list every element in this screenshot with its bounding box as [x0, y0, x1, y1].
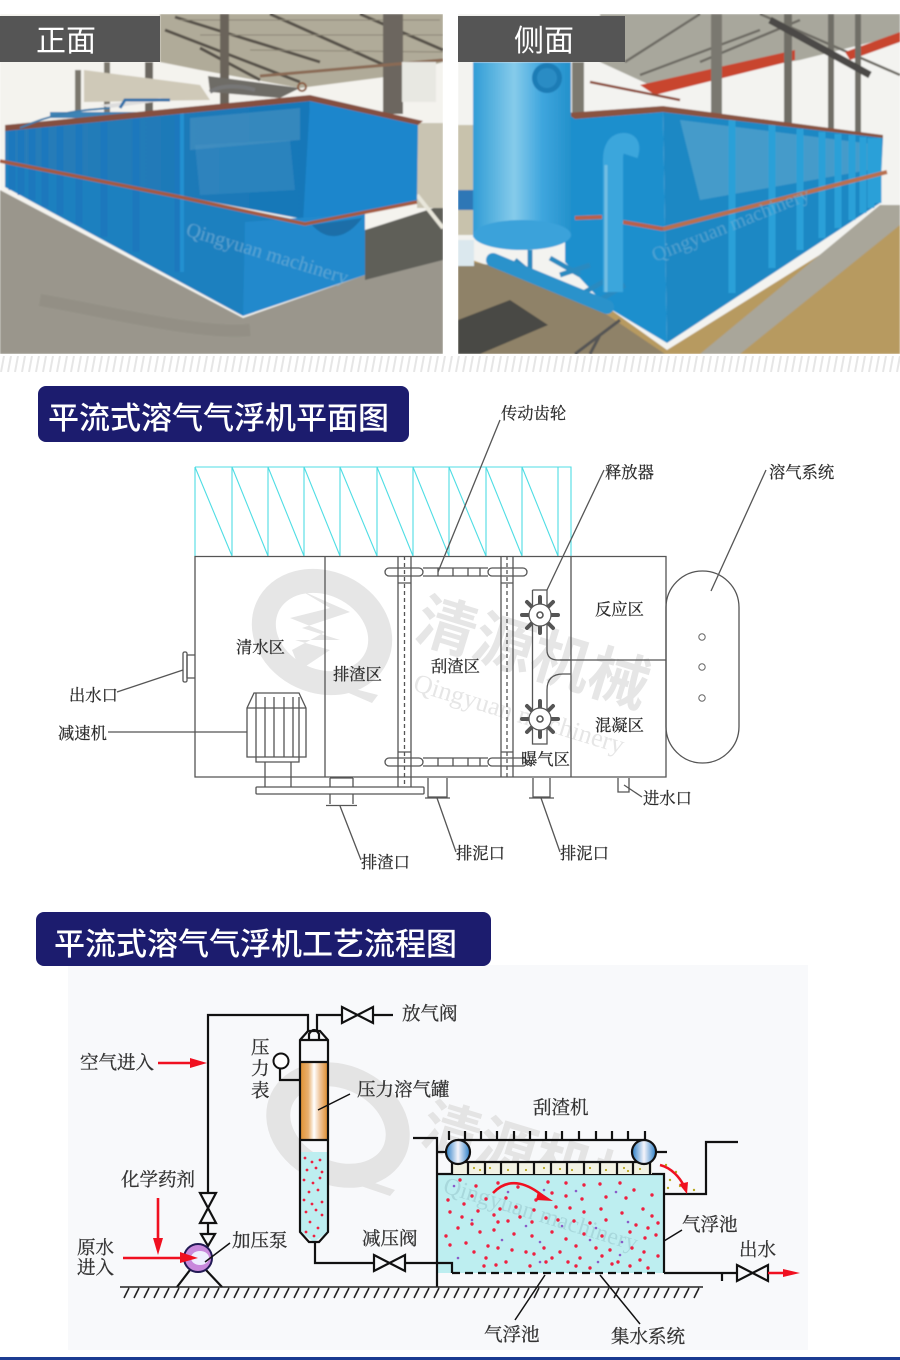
- pressure gauge: [274, 1054, 300, 1080]
- flow labels: 压: [251, 1038, 270, 1059]
- process flow diagram: [68, 965, 808, 1350]
- air release tube: [532, 590, 571, 744]
- air vent valve: [342, 1007, 373, 1023]
- flotation water body: [437, 1174, 664, 1273]
- outlet line: [664, 1273, 737, 1281]
- watermark over water: Qingyuan machinery: [440, 1173, 641, 1257]
- slag outlet: [326, 778, 357, 806]
- air and vent pipes: [208, 1015, 393, 1246]
- plan labels: 排泥口: [560, 844, 609, 863]
- striped divider band: [0, 356, 900, 372]
- heading: plan view: 平流式溶气气浮机平面图: [48, 401, 389, 436]
- plan labels: 曝气区: [521, 750, 570, 769]
- collection dashes: [452, 1272, 660, 1274]
- watermark: Qingyuan machinery: [184, 219, 351, 289]
- flow labels: 表: [251, 1081, 270, 1102]
- plan labels: 溶气系统: [769, 463, 835, 482]
- cyan truss: [195, 467, 571, 556]
- plan labels: 排渣口: [361, 853, 410, 872]
- flow labels: 力: [251, 1059, 270, 1080]
- label: 侧面: 侧面: [514, 25, 574, 58]
- label: 正面: [0, 16, 160, 62]
- plan labels: 混凝区: [595, 716, 644, 735]
- watermark: 清源机械: [414, 1092, 655, 1222]
- plan labels: 出水口: [69, 686, 118, 705]
- flow labels: 原水: [77, 1238, 114, 1259]
- flow labels: 气浮池: [484, 1325, 540, 1346]
- plan labels: 排泥口: [456, 844, 505, 863]
- label: 正面: 正面: [36, 25, 96, 58]
- gear top: [522, 597, 558, 633]
- plan labels: 排渣区: [333, 665, 382, 684]
- bubbles in tank: [446, 1180, 658, 1268]
- heading: process flow: 平流式溶气气浮机工艺流程图: [54, 927, 457, 962]
- plan labels: [58, 404, 835, 872]
- flow labels: 进入: [77, 1258, 115, 1279]
- pump: [177, 1244, 222, 1287]
- gear bottom: [522, 701, 558, 737]
- leader lines: [205, 1094, 682, 1324]
- bottom rule: [0, 1357, 900, 1360]
- plan labels: 清水区: [236, 638, 285, 657]
- overflow trough: [664, 1142, 738, 1194]
- flow labels: 气浮池: [682, 1215, 738, 1236]
- dual check valve: [200, 1193, 216, 1223]
- flow labels: 化学药剂: [121, 1170, 195, 1191]
- plan labels: 释放器: [605, 463, 654, 482]
- leader lines: [108, 420, 766, 860]
- inlet pipe: [315, 1242, 452, 1273]
- drive bar: [256, 787, 424, 794]
- pump valve: [201, 1234, 215, 1246]
- watermark logo: [247, 562, 397, 703]
- heading: process flow: [36, 912, 491, 966]
- watermark text: Qingyuan machinery: [410, 668, 628, 760]
- flow labels: 加压泵: [232, 1231, 288, 1252]
- photo: side view of blue flotation tank: [458, 14, 900, 354]
- right shaft: [501, 556, 513, 777]
- scraper machine: [437, 1131, 667, 1174]
- outlet valve: [737, 1265, 768, 1281]
- label: 侧面: [458, 16, 625, 62]
- watermark text: 清源机械: [408, 586, 657, 721]
- dissolved air tank: [666, 571, 739, 763]
- flow labels: 放气阀: [402, 1004, 458, 1025]
- ground with hatching: [120, 1287, 703, 1298]
- watermark: Qingyuan machinery: [649, 183, 813, 267]
- flow labels: 出水: [739, 1240, 776, 1261]
- flow labels: 减压阀: [362, 1229, 418, 1250]
- plan labels: 进水口: [643, 789, 692, 808]
- plan labels: 减速机: [58, 724, 107, 743]
- flow labels: 空气进入: [80, 1053, 155, 1074]
- watermark: [262, 1055, 655, 1222]
- flow labels: 压力溶气罐: [357, 1080, 450, 1101]
- water outlet: [187, 655, 195, 678]
- pressure relief valve: [374, 1255, 405, 1271]
- pressure tank: [300, 1030, 328, 1242]
- tank walls: [413, 1138, 664, 1287]
- water inlet: [618, 778, 629, 792]
- tank outline and dividers: [195, 556, 666, 777]
- plan view diagram: [58, 404, 835, 872]
- plan labels: 刮渣区: [431, 657, 480, 676]
- plan labels: 传动齿轮: [501, 404, 566, 423]
- sludge outlets: [425, 778, 554, 798]
- diagram background: [68, 965, 808, 1350]
- red arrows: [123, 1058, 800, 1277]
- flow labels: [77, 1004, 776, 1348]
- flow labels: 刮渣机: [533, 1098, 589, 1119]
- chain bottom: [385, 758, 527, 766]
- plan labels: 反应区: [595, 600, 644, 619]
- heading: plan view: [38, 386, 409, 442]
- flow labels: 集水系统: [611, 1327, 686, 1348]
- reducer motor: [247, 693, 306, 787]
- chain top: [385, 568, 527, 576]
- photo: front view of blue flotation tank: [0, 14, 443, 354]
- left shaft: [398, 556, 411, 787]
